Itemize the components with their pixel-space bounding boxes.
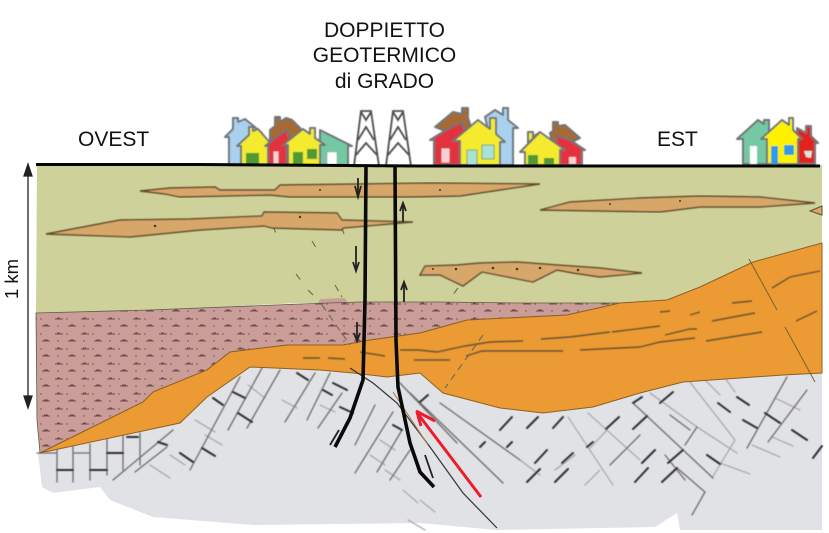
door: blue bbox=[771, 146, 778, 164]
house: red bbox=[556, 135, 585, 165]
title: di GRADO bbox=[335, 70, 434, 93]
window: mint bbox=[482, 145, 494, 159]
house: red bbox=[265, 130, 293, 165]
pink bump bbox=[318, 298, 348, 303]
derrick: right bbox=[386, 111, 411, 166]
house: red bbox=[430, 123, 470, 165]
door: pink bbox=[441, 148, 450, 163]
door: green bbox=[528, 155, 538, 164]
red flow arrow bbox=[416, 411, 481, 497]
layer: orange reservoir bbox=[40, 243, 822, 453]
layer: green upper sediments bbox=[36, 165, 822, 314]
main fault line bbox=[350, 368, 497, 528]
door: green right bbox=[293, 152, 303, 164]
house: yellow right bbox=[283, 128, 325, 165]
derrick: left bbox=[354, 111, 379, 166]
title: DOPPIETTO bbox=[324, 19, 445, 42]
sand lens 5 bbox=[810, 206, 822, 215]
sand lens 1 bbox=[140, 183, 540, 197]
house: blue bbox=[225, 118, 262, 165]
house: brown roof bbox=[435, 108, 471, 135]
house: yellow left bbox=[237, 127, 273, 165]
window: pale bbox=[804, 151, 812, 158]
layer: grey fractured basement bbox=[38, 350, 822, 530]
house: blue back bbox=[485, 108, 518, 165]
door: green bbox=[246, 153, 259, 164]
depth scale arrow bbox=[24, 164, 32, 408]
well: injection bbox=[335, 166, 366, 447]
houses: east group bbox=[737, 118, 818, 164]
house: yellow bbox=[520, 132, 565, 165]
window: blue bbox=[784, 145, 794, 155]
layer: pink clay bbox=[36, 302, 620, 453]
sand lens 2 bbox=[46, 212, 413, 237]
houses: west group bbox=[225, 117, 352, 165]
door: pink bbox=[273, 151, 279, 164]
ground line bbox=[36, 164, 820, 166]
flow arrows bbox=[330, 178, 433, 478]
house: red bbox=[797, 126, 818, 164]
window: green bbox=[307, 149, 317, 159]
title bbox=[313, 19, 456, 93]
sand lens 3 bbox=[420, 262, 642, 286]
house: brown roof bbox=[270, 117, 302, 140]
house: yellow bbox=[761, 118, 802, 164]
door: white bbox=[327, 152, 337, 165]
houses: central group bbox=[430, 108, 518, 165]
fractures in basement bbox=[37, 368, 822, 530]
label: west: OVEST bbox=[78, 128, 149, 151]
door: mint bbox=[467, 150, 477, 165]
well: production bbox=[395, 166, 434, 487]
house: teal bbox=[737, 120, 772, 164]
houses: small group bbox=[520, 122, 585, 165]
title: GEOTERMICO bbox=[313, 44, 456, 67]
depth scale label: 1 km bbox=[1, 259, 22, 299]
house: yellow bbox=[453, 118, 505, 165]
seams in reservoir bbox=[303, 271, 820, 360]
sand lens 4 bbox=[540, 196, 815, 212]
door: pink bbox=[569, 157, 576, 164]
label: east: EST bbox=[657, 128, 698, 151]
door: white bbox=[750, 146, 757, 164]
window: green bbox=[544, 158, 554, 164]
lens dots bbox=[154, 189, 681, 271]
faults on the right bbox=[749, 259, 815, 382]
faults near the wells bbox=[273, 226, 483, 388]
house: teal bbox=[320, 130, 352, 165]
house: brown roof bbox=[550, 122, 580, 143]
